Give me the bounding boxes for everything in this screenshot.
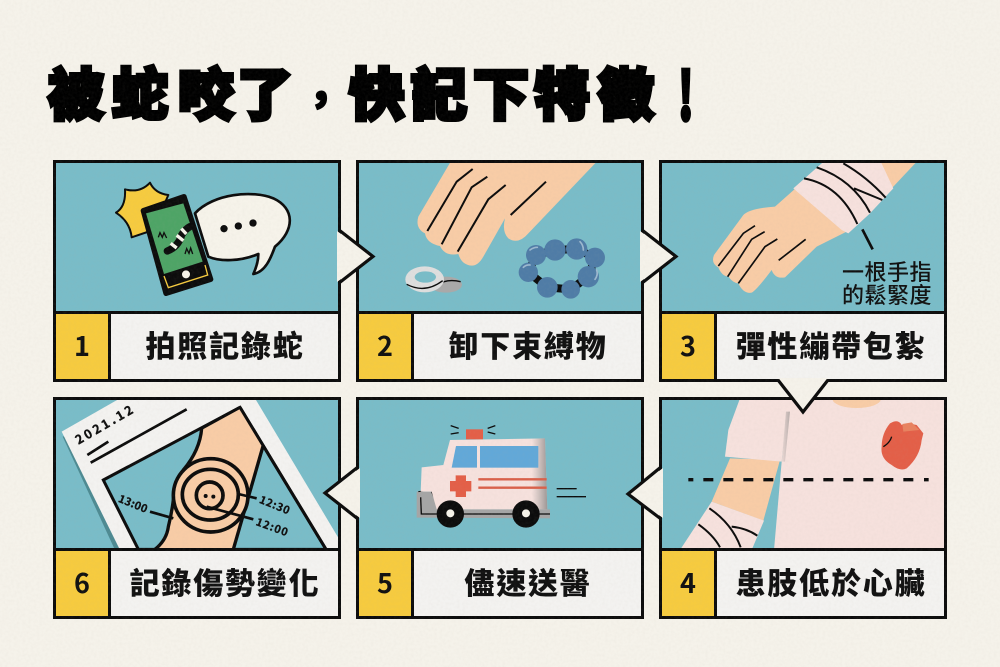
number cell 3 [661,313,715,380]
number 6: 6 [74,562,90,601]
number cell 6 [55,550,109,618]
title: 快記下特徵 [349,51,654,132]
arrow: step 3 to 4 [778,378,828,412]
panel 6: record wound changes [54,398,342,618]
panel 5: get to hospital [358,398,642,618]
number 1: 1 [74,325,90,364]
title [48,43,694,139]
illustration: hand, rings and bead bracelet [405,160,605,299]
panel 3: elastic bandage [660,160,946,380]
number cell 1 [55,313,109,380]
number cell 5 [358,550,412,618]
label 4: 患肢低於心臟 [736,559,926,603]
illustration: ambulance [417,426,586,528]
illustration: bandaged hand [713,160,918,293]
arrow: step 5 to 6 [325,467,360,519]
label 2: 卸下束縛物 [448,322,608,366]
number 4: 4 [680,562,696,601]
illustration: photo of wound with time marks: 12:30 [257,492,293,518]
panel 2: remove constricting items [358,160,642,380]
illustration: phone with snake and speech bubble [116,183,290,293]
number 5: 5 [377,562,393,601]
annotation: one finger of looseness: 一根手指 [842,255,932,287]
arrow: step 2 to 3 [640,230,676,283]
arrow: step 4 to 5 [628,467,663,519]
number 2: 2 [377,325,393,364]
title: , [314,54,328,112]
title: ! [678,43,694,139]
illustration: photo of wound with time marks: 13:00 [116,491,151,517]
annotation: one finger of looseness [842,255,932,310]
label 3: 彈性繃帶包紮 [736,322,926,366]
illustration: photo of wound with time marks [62,398,342,550]
panel 4: keep limb below heart [660,391,947,618]
number 3: 3 [680,325,696,364]
title: 被蛇咬了 [48,51,293,132]
arrow: step 1 to 2 [337,230,373,283]
annotation: one finger of looseness: 的鬆緊度 [842,278,932,310]
panel 1: photograph the snake [54,162,340,380]
illustration: photo of wound with time marks: 2021.12 [71,398,138,448]
number cell 2 [358,313,412,380]
label 6: 記錄傷勢變化 [130,559,320,603]
illustration: torso, heart and bandaged arm [680,391,947,550]
illustration: photo of wound with time marks: 12:00 [254,514,291,540]
label 1: 拍照記錄蛇 [146,322,304,366]
label 5: 儘速送醫 [464,559,592,603]
number cell 4 [661,550,715,618]
